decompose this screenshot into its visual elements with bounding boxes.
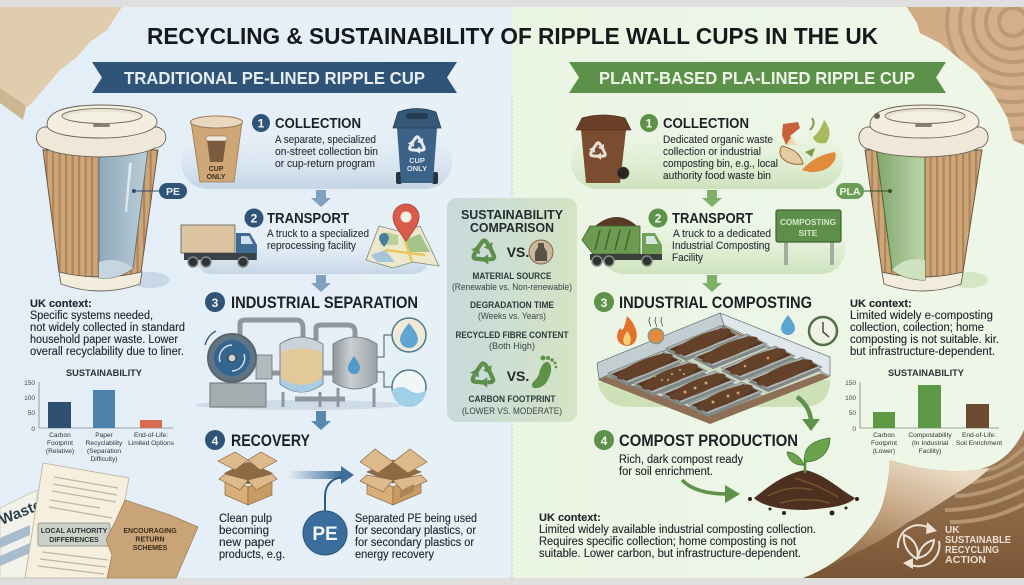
bar chart: PE sustainability: Difficulty)	[90, 456, 118, 463]
bar chart: PLA sustainability: (Lower)	[873, 448, 895, 455]
bar chart: PE sustainability: Footprint	[47, 440, 73, 447]
step 4: compost production: Rich, dark compost ready	[619, 454, 743, 466]
bar chart: PLA sustainability: Soil Enrichment	[956, 440, 1002, 447]
step 1: PLA collection: authority food waste bin	[663, 170, 771, 182]
icon: brown compost bin	[576, 115, 631, 183]
text block: UK context bottom right: UK context:	[539, 512, 601, 524]
step 4: recovery: for secondary plastics or	[355, 537, 474, 549]
icon: cup only paper cup	[190, 116, 242, 182]
text block: UK context left: UK context:	[30, 298, 92, 310]
icon: composting site sign: SITE	[799, 228, 818, 238]
illustration: newspapers and kraft notes: ENCOURAGING	[123, 528, 177, 535]
text block: UK context right: UK context:	[850, 298, 912, 310]
step 2: PE transport	[181, 204, 439, 274]
logo: UK Sustainable Recycling Action: ACTION	[945, 555, 986, 566]
step 2: PLA transport: Industrial Composting	[672, 240, 770, 252]
icon: cup only paper cup: ONLY	[207, 174, 226, 181]
illustration: newspapers and kraft notes: SCHEMES	[133, 545, 168, 552]
step 1: PE collection	[181, 108, 452, 189]
panel: sustainability comparison: (Renewable vs. Non-renewable)	[452, 282, 572, 292]
arrow: collection to transport, PE	[311, 190, 331, 207]
text block: UK context left: not widely collected in standard	[30, 322, 185, 334]
step 1: PE collection: A separate, specialized	[275, 134, 376, 146]
icon: PE badge	[303, 511, 347, 555]
step 4: compost production	[594, 430, 859, 516]
text block: UK context bottom right	[539, 512, 816, 560]
torn kraft paper: top left corner	[0, 7, 122, 120]
icon: blue cup only bin: ONLY	[407, 164, 427, 173]
corrugated kraft: top right corner	[907, 7, 1024, 145]
bar chart: PLA sustainability: 100	[845, 395, 856, 402]
bar chart: PLA sustainability: 150	[845, 380, 856, 387]
icon: food scraps	[780, 118, 836, 172]
icon: composting site sign	[776, 210, 841, 265]
banner: traditional PE-lined ripple cup	[92, 62, 457, 93]
arrow: separation to recovery	[311, 411, 331, 430]
step 4: recovery: Clean pulp	[219, 513, 272, 525]
panel: sustainability comparison: RECYCLED FIBRE CONTENT	[456, 330, 569, 340]
icon: clock	[809, 317, 837, 345]
icon: open box secondary plastics	[360, 449, 427, 505]
text block: UK context left: household paper waste. Lower	[30, 334, 178, 346]
page curl: bottom right kraft corner	[800, 425, 1024, 578]
step 1: PE collection: on-street collection bin	[275, 146, 378, 158]
step 4: recovery: Separated PE being used	[355, 513, 477, 525]
icon: open box clean pulp	[218, 452, 277, 505]
panel: sustainability comparison: (Both High)	[489, 341, 535, 351]
illustration: newspapers and kraft notes: LOCAL AUTHORITY	[41, 528, 108, 535]
text block: UK context bottom right: Limited widely available industrial composting collection.	[539, 524, 816, 536]
text block: UK context left: Specific systems needed,	[30, 310, 153, 322]
arrow: pulp to secondary use	[288, 466, 354, 512]
callout: PE liner label: PE	[166, 186, 180, 198]
bar chart: PLA sustainability: Compostability	[908, 432, 952, 439]
step 3: industrial composting: 3	[601, 296, 608, 310]
step 1: PE collection: 1	[258, 116, 265, 130]
step 2: PE transport: A truck to a specialized	[267, 228, 369, 240]
step 3: industrial separation: 3	[212, 296, 219, 310]
step 2: PLA transport	[582, 208, 845, 274]
logo: UK Sustainable Recycling Action: RECYCLING	[945, 545, 999, 556]
panel: sustainability comparison: DEGRADATION TIME	[470, 300, 554, 310]
arrow: transport to composting, PLA	[702, 275, 722, 292]
arrow: collection to transport, PLA	[702, 190, 722, 207]
illustration: separation machinery	[195, 318, 426, 410]
panel: sustainability comparison: SUSTAINABILITY	[461, 208, 564, 222]
bar chart: PE sustainability: (Separation	[87, 448, 121, 455]
text block: UK context right: collection, coilection; home	[850, 322, 984, 334]
text block: UK context left: overall recyclability due to liner.	[30, 346, 184, 358]
step 1: PE collection: or cup-return program	[275, 158, 375, 170]
icon: cup only paper cup: CUP	[209, 166, 224, 173]
illustration: PLA-lined cup cutaway	[859, 105, 988, 291]
logo: UK Sustainable Recycling Action: UK	[945, 525, 960, 536]
step 2: PLA transport: A truck to a dedicated	[673, 228, 771, 240]
step 4: compost production: for soil enrichment.	[619, 466, 713, 478]
icon: blue cup only bin: CUP	[409, 156, 425, 165]
panel: sustainability comparison: (LOWER VS. MODERATE)	[462, 406, 562, 416]
text block: UK context bottom right: Requires specific collection; home composting is not	[539, 536, 797, 548]
step 4: recovery: energy recovery	[355, 549, 434, 561]
icon: map with location pin	[366, 204, 439, 268]
step 1: PE collection: COLLECTION	[275, 116, 361, 132]
panel: sustainability comparison: COMPARISON	[470, 221, 554, 235]
icon: renewable vs non-renewable	[470, 240, 553, 265]
text block: UK context right: Limited widely e-composting	[850, 310, 993, 322]
bar chart: PLA sustainability: (In Industrial	[912, 440, 949, 447]
icon: green compost truck	[582, 217, 662, 266]
text block: UK context right: but infrastructure-dependent.	[850, 346, 995, 358]
bar chart: PE sustainability: Limited Options	[128, 440, 175, 447]
text block: UK context right	[850, 298, 999, 358]
banner: plant-based PLA-lined ripple cup	[569, 62, 946, 93]
callout: PLA liner label	[836, 183, 892, 199]
step 4: compost production: COMPOST PRODUCTION	[619, 431, 798, 450]
step 2: PE transport: TRANSPORT	[267, 211, 349, 227]
step 2: PLA transport: TRANSPORT	[672, 211, 753, 227]
icon: heat sensor	[648, 317, 664, 344]
step 4: recovery: becoming	[219, 525, 269, 537]
step 2: PE transport: 2	[251, 212, 258, 226]
icon: water droplet	[781, 315, 795, 335]
step 4: recovery: for secondary plastics, or	[355, 525, 476, 537]
step 1: PLA collection	[571, 114, 843, 189]
text block: UK context right: composting is not suitable. kir.	[850, 334, 999, 346]
panel: sustainability comparison: (Weeks vs. Years)	[478, 311, 546, 321]
step 4: recovery: new paper	[219, 537, 275, 549]
step 4: recovery: RECOVERY	[231, 431, 311, 450]
bar chart: PE sustainability: SUSTAINABILITY	[66, 368, 143, 378]
illustration: newspapers and kraft notes: DIFFERENCES	[49, 537, 99, 544]
icon: blue cup only bin	[393, 108, 441, 184]
icon: composting site sign: COMPOSTING	[780, 217, 836, 227]
banner: plant-based PLA-lined ripple cup: PLANT-BASED PLA-LINED RIPPLE CUP	[599, 68, 915, 88]
illustration: PE-lined cup cutaway	[36, 105, 170, 291]
step 1: PLA collection: composting bin, e.g., local	[663, 158, 778, 170]
arrow: composting to compost	[797, 397, 820, 431]
panel: sustainability comparison: MATERIAL SOURCE	[472, 271, 552, 281]
step 2: PLA transport: 2	[655, 212, 662, 226]
step 3: industrial separation	[195, 292, 426, 410]
step 1: PLA collection: Dedicated organic waste	[663, 134, 773, 146]
bar chart: PE sustainability: End-of-Life:	[134, 432, 168, 439]
step 2: PE transport: reprocessing facility	[267, 240, 356, 252]
step 1: PLA collection: 1	[646, 116, 653, 130]
bar chart: PE sustainability: Paper	[95, 432, 114, 439]
bar chart: PE sustainability: Carbon	[49, 432, 71, 439]
text block: UK context left	[30, 298, 185, 358]
bar chart: PE sustainability: 0	[31, 426, 35, 433]
arrow: enrichment to soil	[682, 480, 740, 503]
icon: PE badge: PE	[312, 524, 338, 545]
bar chart: PLA sustainability: 0	[852, 426, 856, 433]
bar chart: PLA sustainability	[845, 368, 1002, 455]
icon: delivery truck	[181, 225, 257, 267]
logo: UK Sustainable Recycling Action	[898, 522, 1011, 569]
bar chart: PE sustainability: 100	[24, 395, 35, 402]
icon: lower vs moderate footprint: VS.	[507, 368, 529, 384]
step 4: recovery: 4	[212, 434, 219, 448]
step 3: industrial separation: INDUSTRIAL SEPARATION	[231, 293, 418, 312]
step 4: compost production: 4	[601, 434, 608, 448]
panel: sustainability comparison: CARBON FOOTPRINT	[468, 394, 556, 404]
icon: lower vs moderate footprint	[469, 356, 557, 388]
bar chart: PLA sustainability: Facility)	[919, 448, 941, 455]
step 3: industrial composting	[594, 292, 837, 431]
text block: UK context bottom right: suitable. Lower carbon, but infrastructure-dependent.	[539, 548, 801, 560]
callout: PLA liner label: PLA	[840, 186, 861, 198]
illustration: newspapers and kraft notes	[0, 463, 198, 578]
bar chart: PLA sustainability: 50	[849, 410, 856, 417]
illustration: composting beds platform	[597, 313, 830, 424]
callout: PE liner label	[132, 183, 187, 199]
bar chart: PE sustainability: 50	[28, 410, 35, 417]
banner: traditional PE-lined ripple cup: TRADITIONAL PE-LINED RIPPLE CUP	[124, 68, 425, 88]
step 1: PLA collection: COLLECTION	[663, 116, 749, 132]
icon: flame	[617, 316, 637, 346]
arrow: transport to separation, PE	[311, 275, 331, 292]
bar chart: PE sustainability	[24, 368, 175, 463]
bar chart: PLA sustainability: Footprint	[871, 440, 897, 447]
title: RECYCLING & SUSTAINABILITY OF RIPPLE WALL CUPS IN THE UK	[147, 23, 878, 49]
panel: sustainability comparison	[447, 198, 577, 422]
step 1: PLA collection: collection or industrial	[663, 146, 761, 158]
bar chart: PLA sustainability: End-of-Life:	[962, 432, 996, 439]
icon: renewable vs non-renewable: VS.	[507, 244, 529, 260]
illustration: compost mound with sprout	[748, 438, 859, 516]
bar chart: PE sustainability: (Relative)	[46, 448, 74, 455]
faint centre dashed line	[511, 96, 513, 578]
bar chart: PLA sustainability: Carbon	[873, 432, 895, 439]
step 4: recovery	[205, 430, 477, 561]
logo: UK Sustainable Recycling Action: SUSTAINABLE	[945, 535, 1011, 546]
illustration: newspapers and kraft notes: RETURN	[135, 536, 165, 544]
step 4: recovery: products, e.g.	[219, 549, 285, 561]
step 2: PLA transport: Facility	[672, 252, 703, 264]
bar chart: PLA sustainability: SUSTAINABILITY	[888, 368, 965, 378]
bar chart: PE sustainability: Recyclability	[86, 440, 123, 447]
step 3: industrial composting: INDUSTRIAL COMPOSTING	[619, 293, 812, 312]
bar chart: PE sustainability: 150	[24, 380, 35, 387]
